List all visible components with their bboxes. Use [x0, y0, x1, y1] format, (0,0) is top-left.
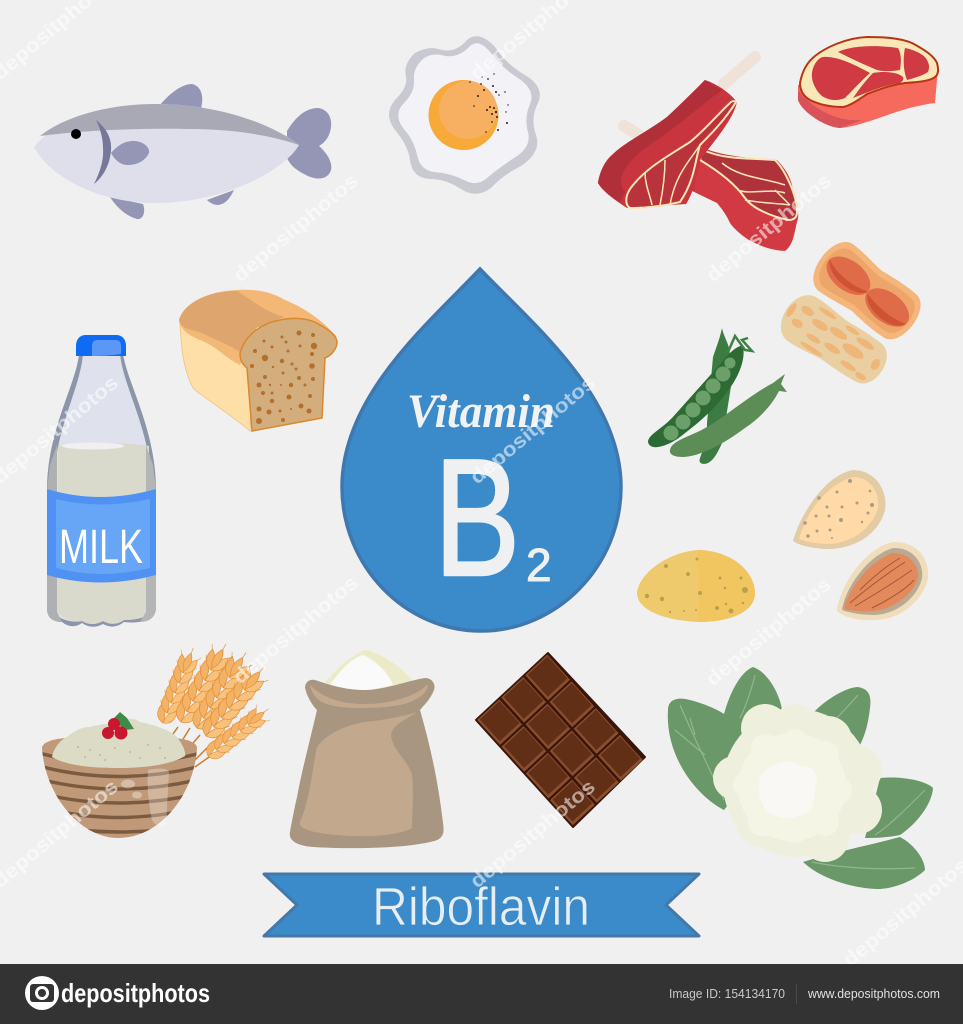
open pod — [648, 346, 744, 447]
pod stem — [728, 336, 752, 352]
open peanut shell — [804, 234, 930, 348]
first chop — [598, 80, 737, 208]
watermarks: depositphotos — [466, 776, 600, 893]
watermarks: depositphotos — [702, 574, 836, 691]
sack light panel — [300, 712, 417, 836]
closed peanut shell — [772, 287, 896, 393]
footer bar — [0, 964, 963, 1024]
vitamin drop — [342, 269, 621, 631]
sack rim fold — [310, 684, 428, 708]
fish back band — [40, 104, 299, 145]
porridge specks — [77, 744, 166, 761]
watermarks: depositphotos — [229, 170, 363, 287]
peanut kernels — [819, 249, 877, 303]
chocolate squares — [477, 655, 643, 825]
berries — [102, 718, 128, 740]
potato specks — [645, 558, 748, 614]
sack body — [290, 678, 444, 848]
steak top face — [800, 37, 938, 107]
vitamin word: Vitamin — [407, 385, 555, 438]
bread side — [180, 325, 252, 431]
bowl highlight — [148, 769, 169, 826]
potato — [637, 550, 755, 622]
pepper specks — [469, 73, 509, 133]
bottle cap — [76, 335, 126, 356]
ribbon shape — [264, 874, 699, 936]
cauliflower — [668, 667, 933, 889]
watermarks: depositphotos — [702, 170, 836, 287]
milk — [57, 443, 150, 624]
almond kernel light — [793, 470, 885, 549]
bowl stripes — [35, 752, 205, 832]
steak — [798, 37, 938, 128]
egg yolk — [428, 80, 498, 150]
egg white — [398, 43, 532, 183]
flour — [325, 650, 412, 695]
milk label text: MILK — [59, 521, 143, 574]
front pod — [670, 374, 787, 457]
watermarks: depositphotos — [229, 572, 363, 689]
steak muscle areas — [812, 46, 929, 100]
fish — [34, 84, 331, 219]
egg white shadow — [389, 36, 540, 194]
flour sack — [290, 650, 444, 848]
chop bones — [624, 57, 755, 137]
fish dorsal fin — [160, 84, 202, 108]
ribbon text: Riboflavin — [372, 877, 590, 937]
bottle label — [47, 489, 156, 582]
bowl — [42, 738, 197, 838]
peas — [664, 358, 736, 440]
almond seed — [844, 553, 918, 611]
bottle glass — [47, 354, 156, 627]
watermarks: depositphotos — [839, 855, 963, 972]
porridge bowl with wheat — [35, 638, 275, 838]
second chop marbling — [722, 163, 790, 205]
subscript 2: 2 — [526, 539, 552, 591]
bread top crust — [179, 290, 337, 365]
lamb chops — [598, 57, 798, 251]
second chop cut face — [700, 150, 797, 220]
wheat stems — [160, 727, 212, 767]
fried egg — [389, 36, 540, 194]
first chop marbling — [645, 145, 700, 205]
leaves — [113, 712, 134, 730]
chocolate bar — [476, 653, 645, 827]
leaves — [668, 667, 933, 889]
footer logo text: depositphotos — [61, 978, 210, 1008]
steak side — [798, 68, 938, 128]
back pod — [700, 328, 733, 464]
leaf veins — [675, 675, 925, 869]
watermarks: depositphotos — [466, 372, 600, 489]
fish gill — [94, 120, 111, 184]
website: www.depositphotos.com — [807, 987, 940, 1001]
image id: Image ID: 154134170 — [669, 987, 785, 1001]
wheat ears — [153, 638, 275, 764]
cauliflower centre — [759, 762, 817, 818]
almond specks — [803, 479, 874, 539]
bread holes — [250, 330, 317, 424]
first chop rim — [598, 80, 722, 202]
fish body — [34, 104, 299, 203]
milk bottle — [47, 335, 156, 627]
chocolate base — [476, 653, 645, 827]
cauliflower middle — [733, 729, 852, 843]
fish eye — [71, 129, 81, 139]
fish lower fins — [110, 190, 234, 219]
fish pectoral fin — [111, 141, 149, 165]
riboflavin ribbon — [264, 874, 699, 937]
bread slice — [240, 318, 337, 431]
pea pods — [648, 328, 787, 464]
cauliflower outer head — [713, 704, 882, 862]
letter B: B — [434, 424, 520, 611]
peanuts — [772, 234, 930, 393]
drop shape — [342, 269, 621, 631]
footer logo icon — [25, 976, 59, 1010]
porridge — [52, 719, 185, 768]
bread loaf — [179, 290, 337, 431]
second chop — [690, 148, 798, 251]
milk highlight — [62, 442, 124, 450]
first chop cut face — [626, 101, 736, 208]
almond in shell — [837, 542, 928, 620]
fish tail — [287, 108, 331, 179]
